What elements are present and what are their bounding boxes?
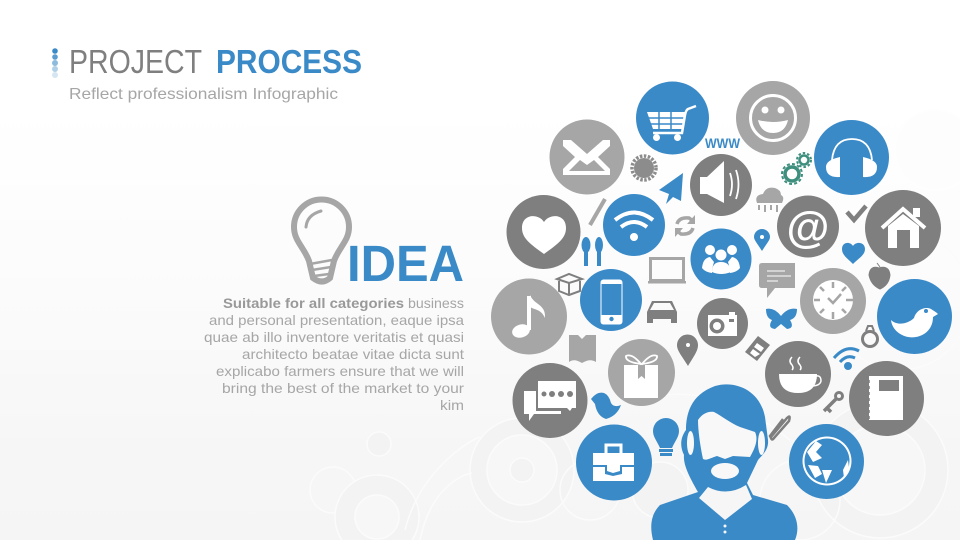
body text: business: [408, 295, 464, 311]
icon: refresh: [675, 215, 695, 237]
icon: paper plane: [659, 173, 683, 204]
icon: envelope: [550, 120, 624, 194]
icon: bird circle: [877, 279, 952, 354]
body text: Suitable for all categories: [223, 295, 404, 311]
icon: notebook: [849, 361, 924, 436]
icon: smartphone: [580, 269, 642, 331]
icon: battery: [745, 336, 770, 361]
icon: gear sun: [632, 156, 656, 180]
icon: shopping cart: [636, 82, 709, 154]
icon: idea light bulb: [294, 200, 349, 282]
icon: music note: [491, 278, 567, 354]
body text: [204, 295, 464, 413]
icon: globe: [789, 424, 864, 499]
body text: and personal presentation, eaque ipsa: [209, 312, 464, 328]
icon: key: [824, 392, 842, 412]
icon: paperclip: [770, 417, 790, 440]
icon: blue heart: [842, 243, 865, 264]
icon: heart circle: [506, 195, 580, 269]
title marker dots: [52, 48, 58, 78]
icon: people: [690, 228, 752, 290]
subtitle: Reflect professionalism Infographic: [69, 86, 338, 103]
icon: small blue bird: [591, 393, 621, 419]
icon: book: [569, 335, 596, 363]
icon: chat bubbles: [512, 363, 588, 438]
icon: smiley: [736, 81, 810, 155]
icon: blue map pin: [754, 229, 770, 251]
icon: coffee cup: [765, 341, 831, 407]
icon: butterfly: [766, 309, 797, 329]
title: [69, 43, 362, 80]
icon: rain cloud: [756, 188, 783, 212]
icon: grey map pin: [677, 334, 698, 366]
icon: at sign: [777, 196, 839, 258]
icon: pencil: [590, 199, 605, 225]
title: PROCESS: [216, 43, 362, 80]
icon: laptop: [648, 258, 686, 284]
icon: open box: [557, 274, 582, 295]
body text: kim: [440, 397, 464, 413]
icon: car: [647, 301, 677, 323]
icon: gears: [782, 153, 811, 184]
icon: camera: [697, 298, 748, 349]
icon: home: [865, 190, 941, 266]
icon: at sign: @: [787, 203, 829, 252]
body text: explicabo farmers ensure that we will: [216, 363, 464, 379]
title: PROJECT: [69, 43, 202, 80]
icon: small blue wifi: [834, 349, 859, 368]
icon: wifi circle: [603, 194, 665, 256]
icon: headphones: [814, 120, 889, 195]
icon: check mark: [847, 206, 866, 220]
icon: briefcase: [576, 424, 652, 500]
icon: speech bubble: [759, 263, 795, 298]
icon: apple: [869, 263, 890, 289]
icon: speaker: [690, 154, 752, 216]
icon: blue bulb: [653, 418, 679, 456]
body text: quae ab illo inventore veritatis et quasi: [204, 329, 464, 345]
icon: www: WWW: [705, 135, 741, 151]
icon: gift: [608, 339, 675, 406]
icon: man with beard: [651, 384, 797, 540]
body text: architecto beatae vitae dicta sunt: [242, 346, 464, 362]
heading: IDEA: IDEA: [347, 235, 464, 292]
body text: bring the best of the market to your: [222, 380, 464, 396]
icon: ring: [862, 326, 878, 346]
icon: clock: [800, 268, 866, 334]
icon: spoon and fork: [582, 237, 603, 266]
